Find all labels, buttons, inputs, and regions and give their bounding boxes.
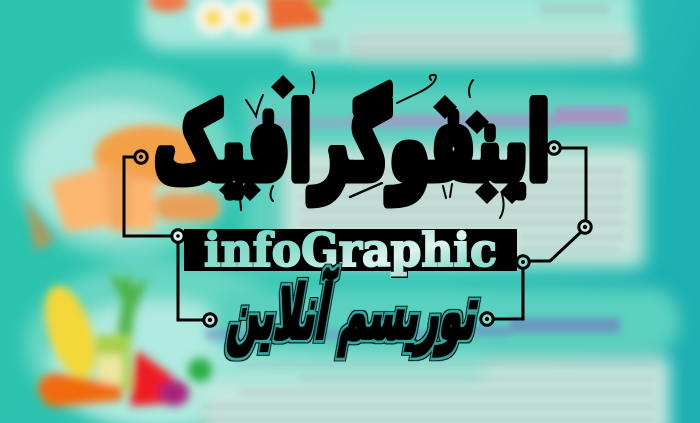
background: vegetables <box>35 270 212 407</box>
subtitle: online tourism: توریسم آنلاین <box>223 268 486 357</box>
background: breakfast plate food <box>148 0 332 35</box>
wordmark bar: infoGraphic: infoGraphic <box>204 223 497 277</box>
circuit connector: left <box>124 151 216 326</box>
background: bread <box>25 125 220 252</box>
background: blurred text lines and headings <box>200 3 655 422</box>
circuit connector: right <box>481 142 591 325</box>
title: Persian infographic word: اینفوگرافیک <box>154 85 550 203</box>
title ornaments: diamond dots and small calligraphic marks <box>219 72 524 218</box>
